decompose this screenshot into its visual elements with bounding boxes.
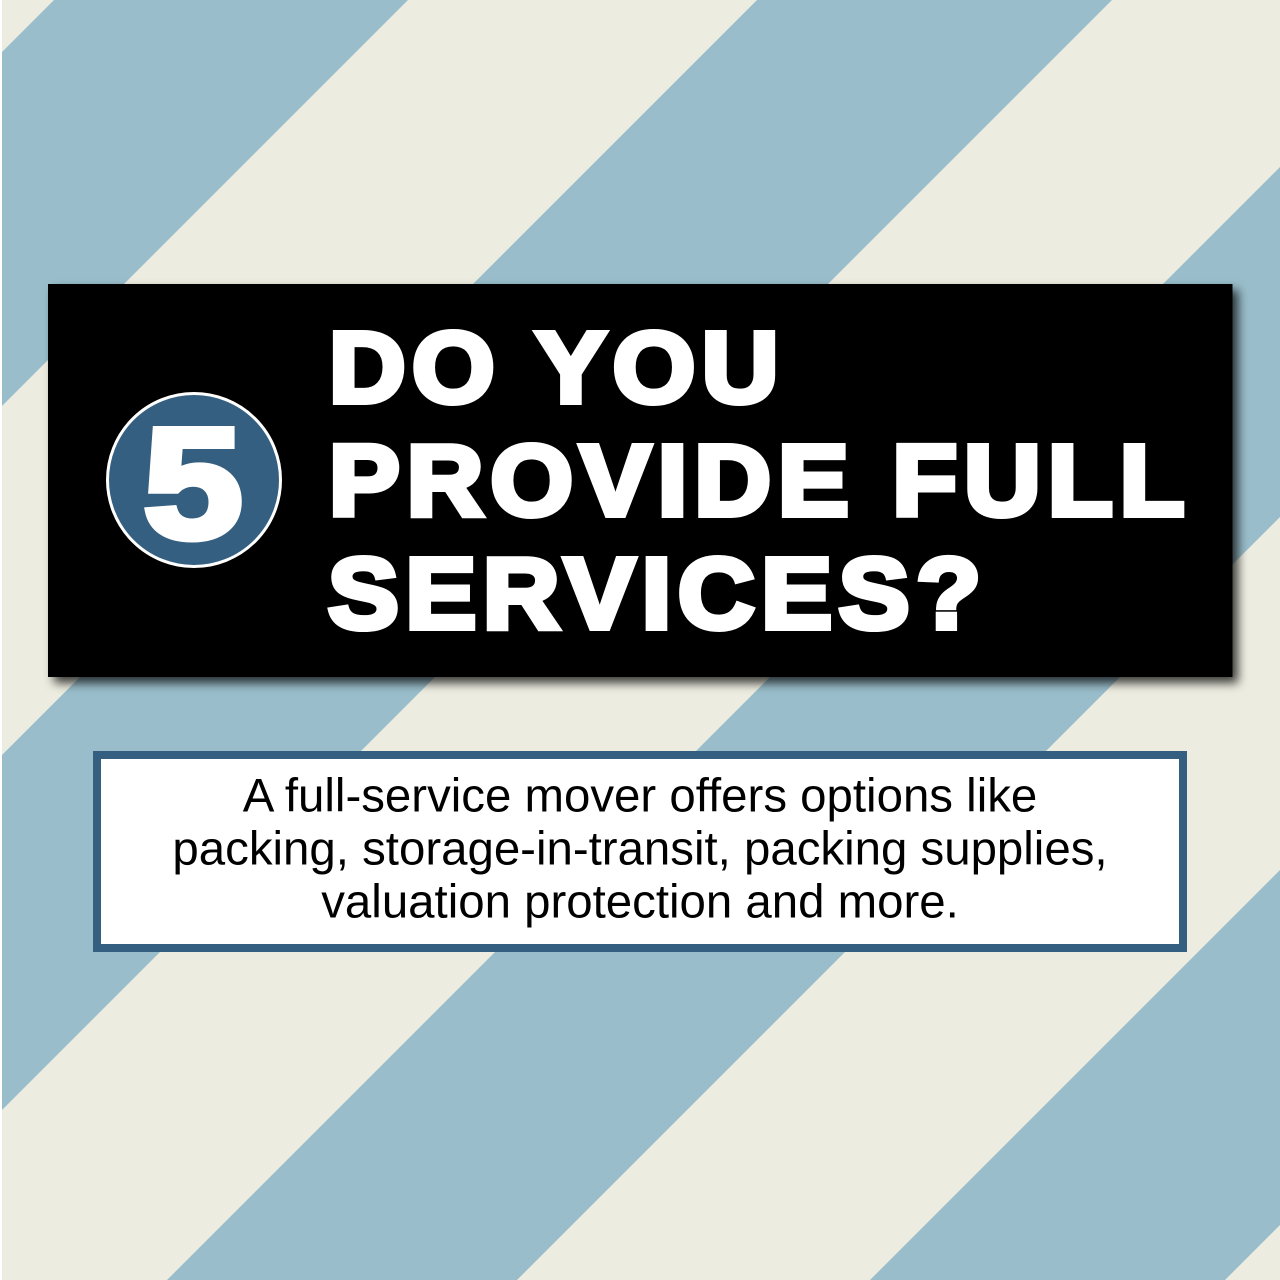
heading: PROVIDE FULL	[329, 425, 1184, 536]
heading: SERVICES?	[328, 538, 981, 649]
description text: valuation protection and more.	[321, 876, 959, 928]
heading	[328, 312, 1184, 649]
description text: packing, storage-in-transit, packing supplies,	[172, 822, 1108, 876]
panel: description	[97, 755, 1183, 948]
panel: question header	[48, 284, 1232, 677]
number badge	[108, 394, 280, 571]
heading: DO YOU	[329, 312, 778, 423]
description text: A full-service mover offers options like	[243, 770, 1037, 822]
header shadow	[54, 290, 1238, 683]
number badge: 5	[143, 396, 243, 571]
description text	[172, 770, 1108, 928]
